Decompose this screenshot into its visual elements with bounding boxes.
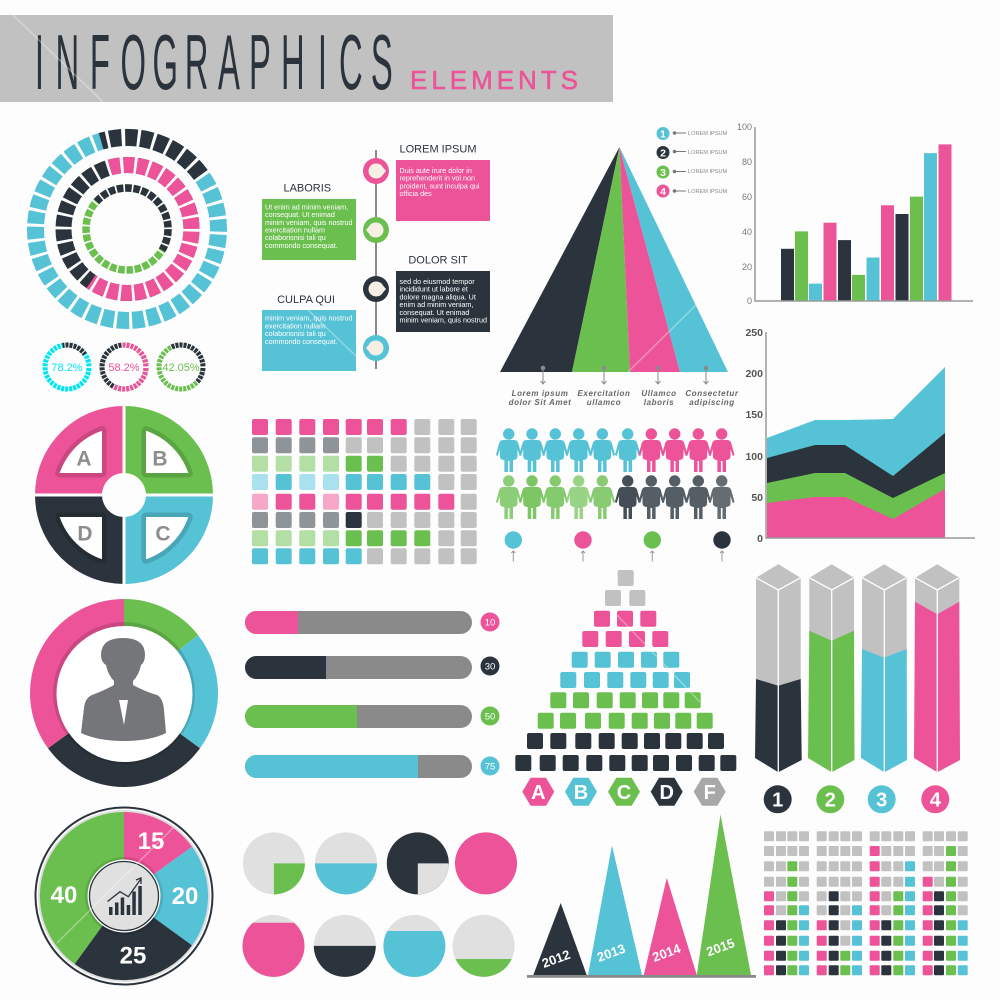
circle three quarter dark	[387, 832, 449, 894]
text block dolor sit: incididunt ut labore et	[400, 285, 468, 294]
ring 42.05%: 42.05%	[162, 362, 200, 374]
partially filled circles	[242, 832, 517, 977]
quadrant C	[146, 517, 188, 559]
square matrix chart	[252, 419, 477, 564]
hexagon legend: F	[704, 782, 716, 804]
triangle 2015	[697, 814, 751, 975]
progress bar 10	[245, 611, 500, 634]
group two	[817, 831, 862, 975]
area chart labels: 50	[751, 492, 763, 504]
triangle 2012: 2012	[540, 947, 572, 971]
text block dolor sit: sed do eiusmod tempor	[400, 277, 475, 286]
area chart labels: 100	[745, 451, 763, 463]
progress bar 10: 10	[485, 618, 495, 628]
hexagon legend	[522, 778, 726, 806]
text block culpa qui: CULPA QUI	[277, 294, 335, 306]
title: infographics: INFOGRAPHICS	[35, 19, 393, 106]
hexagon legend: A	[531, 782, 546, 804]
isometric bar numbers: 1	[772, 790, 783, 812]
segmented pie chart with chart icon	[36, 808, 212, 984]
person donut chart	[30, 599, 218, 787]
timeline panel	[262, 144, 490, 371]
isometric bar chart	[755, 564, 960, 813]
circle cyan most	[383, 915, 445, 977]
text block laboris	[262, 182, 356, 260]
small square matrix	[764, 831, 968, 975]
bar chart axis labels	[737, 122, 752, 306]
progress bar 30	[245, 656, 500, 679]
text block lorem ipsum	[396, 144, 490, 221]
circle green low	[453, 915, 515, 977]
area chart labels: 200	[745, 368, 763, 380]
pyramid captions: Exercitation	[578, 389, 630, 398]
text block laboris: commondo consequat.	[265, 241, 338, 250]
text block laboris: exercitation nullam	[265, 226, 325, 234]
people legend pins	[505, 531, 731, 562]
pyramid legend: 4	[660, 186, 666, 198]
isometric bar numbers	[764, 785, 949, 813]
timeline node pink	[363, 158, 389, 184]
quadrant pie with letters	[30, 400, 218, 590]
people pictogram chart	[496, 428, 734, 562]
isometric bar numbers: 2	[825, 790, 836, 812]
pyramid captions: adipiscing	[689, 398, 735, 407]
bar chart	[737, 122, 973, 306]
pyramid legend: 1	[660, 128, 666, 140]
circle pink most	[242, 915, 304, 977]
quadrant D: D	[77, 522, 93, 546]
icon: growth chart	[108, 878, 142, 915]
text block dolor sit: DOLOR SIT	[408, 254, 468, 266]
text block lorem ipsum: reprehenderit in vol non	[400, 174, 475, 183]
middle ring	[48, 150, 207, 308]
pie values: 40	[51, 882, 77, 909]
ring 78.2%: 78.2%	[51, 362, 83, 374]
circle full pink	[455, 832, 517, 894]
pyramid legend: LOREM IPSUM	[688, 189, 728, 195]
group one	[764, 831, 809, 975]
title banner	[0, 15, 613, 106]
subtitle: elements: ELEMENTS	[410, 65, 578, 95]
text block dolor sit: minim veniam, quis nostrud	[400, 316, 487, 325]
bar chart axis labels: 20	[742, 262, 752, 272]
people row two	[496, 475, 734, 519]
outer ring	[14, 116, 240, 342]
pyramid legend	[656, 127, 728, 198]
text block lorem ipsum: Duis aute irure dolor in	[400, 166, 472, 175]
stacked area chart	[745, 327, 975, 545]
ring 58.2%	[100, 343, 148, 391]
ring 78.2%	[42, 342, 92, 392]
text block culpa qui: exercitation nullam	[265, 322, 325, 330]
text block lorem ipsum: proident, sunt inculpa qui	[400, 182, 480, 190]
quadrant B: B	[152, 448, 168, 470]
isometric bar 4	[914, 564, 960, 772]
pyramid pointers	[540, 366, 708, 384]
quadrant D	[60, 517, 102, 559]
triangle 2014: 2014	[650, 941, 683, 965]
circle half dark	[314, 915, 376, 977]
isometric bar 1	[755, 564, 802, 772]
text block laboris: minim veniam, quis nostrud	[265, 218, 352, 227]
text block culpa qui	[262, 294, 356, 371]
text block culpa qui: commondo consequat.	[265, 337, 338, 346]
area chart labels: 150	[745, 409, 763, 421]
pyramid captions	[509, 389, 739, 407]
bar chart bars	[781, 144, 952, 301]
bar chart axis labels: 80	[742, 157, 752, 167]
timeline node green	[363, 217, 389, 243]
triangle 2013: 2013	[595, 941, 627, 965]
text block dolor sit: dolore magna aliqua. Ut	[400, 292, 476, 302]
bar chart axis labels: 60	[742, 192, 752, 202]
pyramid legend: 3	[660, 167, 666, 179]
triangle 2013	[588, 846, 642, 975]
progress bar 75: 75	[485, 762, 495, 772]
segmented concentric ring chart	[14, 116, 240, 342]
progress bar 30: 30	[485, 662, 495, 672]
area chart labels: 250	[745, 327, 763, 339]
pie values	[51, 828, 198, 970]
progress bar 50: 50	[485, 712, 495, 722]
text block laboris: Ut enim ad minim veniam,	[265, 202, 348, 212]
quadrant A: A	[76, 448, 92, 470]
quadrant B	[146, 431, 188, 473]
pie values: 20	[172, 883, 198, 910]
people row one	[496, 428, 734, 472]
pyramid captions: Lorem ipsum	[512, 389, 568, 398]
square pyramid chart	[515, 570, 736, 771]
text block lorem ipsum: LOREM IPSUM	[399, 144, 477, 156]
bar chart axis labels: 40	[742, 227, 752, 237]
pyramid captions: dolor Sit Amet	[509, 398, 571, 407]
circle half cyan	[315, 832, 377, 894]
bar chart axis labels: 100	[737, 122, 752, 132]
pyramid captions: Consectetur	[685, 389, 739, 398]
pyramid chart	[500, 127, 739, 407]
inner ring	[69, 171, 185, 287]
isometric bar 2	[808, 564, 854, 772]
text block culpa qui: colaborisnisi tali qu	[265, 329, 326, 338]
area chart labels: 0	[757, 533, 763, 545]
pie values: 25	[120, 942, 146, 970]
timeline node dark	[363, 276, 389, 302]
isometric bar numbers: 4	[930, 790, 942, 812]
text block culpa qui: minim veniam, quis nostrud	[265, 314, 352, 323]
quadrant C: C	[155, 522, 171, 546]
pyramid legend: LOREM IPSUM	[688, 131, 728, 137]
progress bar 50	[245, 705, 500, 728]
text block dolor sit: consequat. Ut enimad	[400, 308, 469, 317]
pyramid legend: 2	[660, 148, 666, 160]
pyramid slices	[500, 147, 728, 372]
text block laboris: LABORIS	[283, 182, 331, 194]
pyramid legend: LOREM IPSUM	[688, 150, 728, 156]
pyramid captions: ullamco	[587, 398, 621, 407]
triangle 2014	[644, 878, 697, 975]
isometric bar 3	[861, 564, 907, 772]
isometric bar numbers: 3	[876, 790, 887, 812]
hexagon legend: B	[574, 782, 588, 804]
bar chart axis labels: 0	[747, 296, 752, 306]
pyramid captions: laboris	[644, 398, 674, 407]
progress bars	[245, 611, 500, 778]
text block dolor sit	[396, 254, 490, 332]
hexagon legend: C	[617, 782, 631, 804]
text block lorem ipsum: officia des	[400, 189, 432, 198]
small percentage rings	[42, 338, 210, 396]
triangle 2015: 2015	[704, 935, 737, 959]
pie values: 15	[138, 828, 164, 855]
hexagon legend: D	[659, 782, 674, 804]
triangle 2012	[533, 903, 587, 975]
text block laboris: consequat. Ut enimad	[265, 210, 335, 219]
ring 58.2%: 58.2%	[108, 362, 140, 374]
timeline node cyan	[363, 335, 389, 361]
circle quarter green	[243, 832, 305, 894]
ring 42.05%	[152, 338, 210, 396]
icon: businessman silhouette	[81, 638, 166, 741]
quadrant A	[60, 431, 102, 473]
pyramid legend: LOREM IPSUM	[688, 169, 728, 175]
text block laboris: colaborisnisi tali qu	[265, 233, 326, 242]
group three	[870, 831, 915, 975]
yearly triangle chart	[527, 814, 756, 978]
timeline axis	[375, 150, 377, 369]
group four	[923, 831, 968, 975]
area bands	[767, 367, 945, 538]
pyramid captions: Ullamco	[641, 389, 677, 398]
area chart labels	[745, 327, 763, 545]
progress bar 75	[245, 755, 500, 778]
text block dolor sit: enim ad minim veniam,	[400, 300, 473, 309]
